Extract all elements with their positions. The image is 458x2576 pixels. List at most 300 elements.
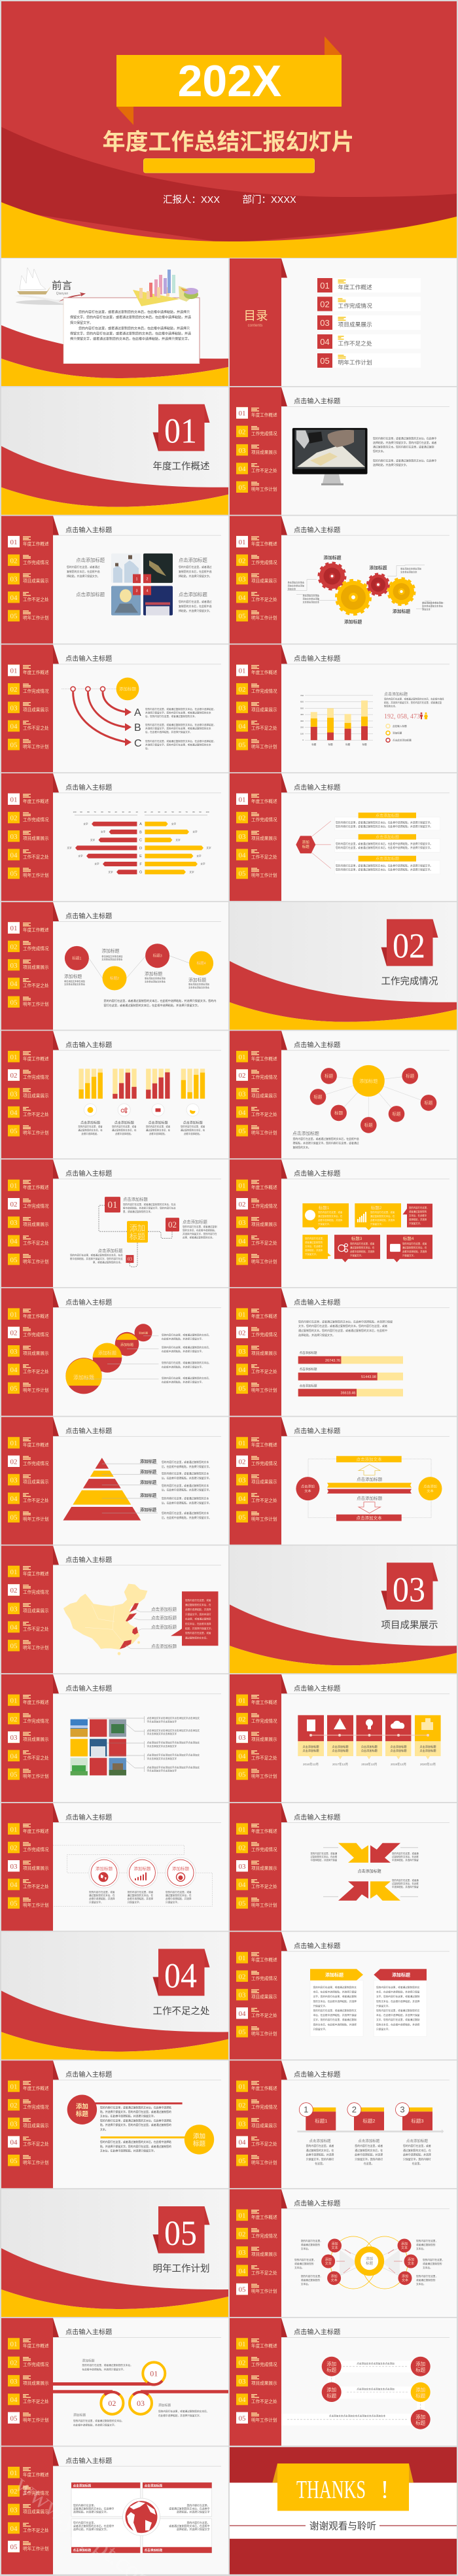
stacked bar chart: 标题	[345, 743, 351, 746]
box icons	[305, 1210, 400, 1252]
network note: 择粘贴，并选择只保留文字。您的内容打在这里，或者通过	[293, 1141, 359, 1144]
arrow descriptions	[145, 707, 216, 750]
box paragraphs	[70, 309, 191, 342]
sidebar: 工作完成情况	[251, 1718, 277, 1723]
ring 02: 02	[108, 2399, 116, 2408]
gear callouts: 添加文本	[422, 607, 431, 611]
flow circles: 标题	[415, 2392, 426, 2399]
top band	[230, 2447, 457, 2482]
card text: 您的内容打在这里，或者通过复制您的文	[376, 2009, 420, 2012]
card text: 您的内容打在这里，或者	[306, 2144, 334, 2147]
sidebar: 项目成果展示	[251, 1737, 277, 1742]
heading: 点击输入主标题	[65, 1298, 112, 1307]
intro text: 通过复制您的文本。您的内容打在这里，或者通过复制您的文本后，在此框中	[298, 1328, 387, 1332]
sidebar: 明年工作计划	[251, 486, 277, 492]
sidebar: 03	[10, 2506, 18, 2514]
axis: 80	[192, 811, 195, 813]
sidebar: 02	[10, 1330, 17, 1337]
card text: 只保留文字。	[376, 2027, 391, 2031]
circle notes: 单击添加文本单击添加	[145, 977, 166, 980]
sidebar: 01	[10, 538, 17, 546]
sidebar: 明年工作计划	[251, 1387, 277, 1393]
top bar	[336, 1456, 402, 1462]
sidebar: 工作完成情况	[251, 1332, 277, 1337]
progress labels: 36618.46	[341, 1391, 356, 1395]
sidebar: 05	[10, 1771, 18, 1779]
sidebar	[1, 1031, 228, 1158]
bar labels: 文字	[192, 830, 198, 834]
sidebar: 工作不足之处	[251, 2141, 277, 2147]
body text: 您的内容打在这里，或者通过复制您的文本后，在此框中选择粘	[100, 2140, 171, 2144]
sidebar: 02	[238, 1201, 246, 1209]
hexagon: 添加	[302, 839, 309, 845]
sidebar	[1, 516, 228, 644]
card text: 点击添加标题	[309, 2138, 331, 2144]
sidebar: 年度工作概述	[23, 1570, 49, 1576]
ring notes: 添加标题	[82, 2359, 95, 2363]
axis: 40	[164, 811, 167, 813]
card text: 此框中选择粘贴，并选择	[355, 2153, 383, 2157]
flow notes	[70, 1196, 217, 1264]
box text: 此框中选择粘贴，并选择	[370, 1218, 395, 1222]
card text: 文字。您的内容打在这里，或者通过复制	[313, 1995, 357, 1998]
sidebar: 05	[238, 1771, 246, 1779]
network nodes: 标题	[325, 1073, 334, 1079]
sidebar: 工作完成情况	[251, 1203, 277, 1209]
network nodes: 标题	[314, 1094, 323, 1100]
satellite nodes: 文本	[401, 2246, 408, 2250]
sidebar: 01	[10, 796, 17, 803]
slide: three numbered cards	[230, 2060, 457, 2188]
axis: 100	[73, 811, 77, 813]
slide: converging arrows	[230, 1803, 457, 1931]
heading: 点击输入主标题	[294, 2328, 340, 2337]
bar labels: 文字	[171, 822, 176, 825]
sidebar: 工作完成情况	[23, 1718, 49, 1723]
subtitle pill	[144, 158, 314, 173]
sidebar: 02	[10, 2359, 17, 2367]
slide: table of contents	[230, 258, 457, 386]
level text	[162, 1460, 211, 1519]
sidebar: 02	[238, 2359, 246, 2367]
sidebar: 工作完成情况	[23, 2361, 49, 2367]
sidebar	[1, 1674, 228, 1802]
sidebar: 05	[238, 612, 246, 620]
sidebar: 工作不足之处	[23, 2141, 49, 2147]
medallion text: 只保留文字。	[166, 1900, 180, 1903]
slide: circle flow	[230, 2318, 457, 2446]
sidebar: 04	[10, 2396, 18, 2404]
sidebar: 04	[10, 851, 18, 859]
chart note: 粘贴，并选择只保留文字。您的内容打在这里，或者通过复	[384, 701, 442, 704]
sidebar	[230, 387, 457, 515]
slide: butterfly chart	[1, 773, 228, 901]
flow notes: 里，或者通过复制您的文本。	[123, 1210, 153, 1213]
sidebar: 03	[10, 1091, 18, 1099]
map labels: 点击添加标题	[151, 1606, 177, 1612]
sidebar: 02	[238, 1716, 246, 1723]
level text: 您的内容打在这里，或者通过复制您的文本	[162, 1484, 209, 1487]
sidebar: 年度工作概述	[23, 798, 49, 804]
circle stack: 添加标题	[120, 1343, 133, 1347]
bar labels: A	[139, 822, 142, 826]
slide: photo grid	[1, 516, 228, 644]
progress labels: 点击添加标题	[300, 1350, 317, 1355]
hub text: 或者通过复制您的	[416, 2243, 436, 2246]
level labels: 添加标题	[140, 1458, 157, 1464]
sidebar: 03	[10, 962, 18, 970]
box 01: 01	[107, 1200, 118, 1210]
gear labels: 添加标题	[369, 565, 387, 571]
heading: 点击输入主标题	[294, 2199, 340, 2208]
panel text: 选择粘贴，并选择只保留文字。	[73, 2528, 109, 2531]
text: description	[373, 437, 436, 467]
photo captions	[67, 557, 212, 612]
circles: 标题2	[110, 976, 119, 981]
satellite nodes: 文本	[402, 2278, 408, 2283]
sidebar: 工作完成情况	[251, 431, 277, 436]
box text: 或者通过复制您的	[305, 1241, 323, 1244]
circle notes: 在此框中选择粘贴，并选择只保留文字。	[162, 1365, 204, 1368]
card icons	[307, 1718, 433, 1731]
gear callouts: 单击添加文本单击	[288, 581, 304, 584]
card text: 2018年12月	[361, 1762, 377, 1767]
sidebar: 04	[238, 1495, 246, 1503]
sidebar: 02	[238, 1458, 246, 1466]
red circle with bar	[67, 2095, 183, 2125]
sidebar: 工作不足之处	[23, 725, 49, 731]
slide: section 02	[230, 902, 457, 1030]
sidebar: 02	[10, 557, 17, 565]
red note: 此框中选择粘贴，并选择	[185, 1608, 211, 1611]
flow circles: 添加	[415, 2414, 425, 2420]
sidebar: 03	[238, 704, 246, 712]
box text: 您的内容打在这里，或者	[318, 1210, 343, 1214]
yellow tag: 添加标题	[325, 1972, 344, 1977]
arrow text: 您的内容打在这里，或者通	[310, 1852, 338, 1855]
sidebar: 项目成果展示	[251, 1350, 277, 1356]
sidebar: 01	[10, 925, 17, 932]
axis: 90	[199, 811, 202, 813]
sidebar	[230, 2189, 457, 2317]
circle stack: 添加标题	[73, 1374, 94, 1381]
card text: 您的内容打在这里，或者通过复制您的文	[313, 1985, 357, 1989]
sidebar: 年度工作概述	[251, 798, 277, 804]
progress labels	[300, 1350, 376, 1395]
letters: C	[134, 738, 142, 749]
slide: two circles with bars	[1, 2060, 228, 2188]
sidebar: 01	[238, 1053, 246, 1061]
card text: 您的内容打在这里，或者通过复制您的文	[376, 1985, 420, 1989]
arrow text: 过复制您的文本后，在此框	[310, 1855, 338, 1858]
sidebar: 项目成果展示	[23, 964, 49, 970]
sidebar: 05	[10, 1900, 18, 1908]
sidebar: 03	[10, 1734, 18, 1742]
body text: 贴，并选择只保留文字。您的内容打在这里，或者通过复制您的	[100, 2145, 171, 2148]
red circle with bar: 标题	[76, 2110, 88, 2118]
circles	[65, 944, 213, 991]
sidebar: 工作不足之处	[251, 468, 277, 474]
sidebar: 04	[10, 1495, 18, 1503]
sidebar: 年度工作概述	[251, 1184, 277, 1190]
hub text: 或者通过复制您的	[294, 2262, 314, 2265]
dotted frame	[308, 1459, 431, 1518]
card panels	[310, 1980, 427, 2036]
axis: 50	[171, 811, 174, 813]
sidebar	[1, 1545, 228, 1673]
text panels: 您的内容打在这里，或者通过复制您的文本后，在此框中选择粘贴，并选择只保留文字。	[336, 864, 432, 867]
captions: 点击添加标题	[183, 1120, 203, 1125]
sidebar: 03	[238, 1477, 246, 1485]
sidebar: 年度工作概述	[23, 927, 49, 933]
timeline line	[309, 1734, 429, 1737]
sidebar: 02	[10, 943, 17, 951]
hub text	[294, 2239, 444, 2285]
bar labels: F	[139, 863, 142, 867]
card labels: 标题3	[411, 2117, 424, 2124]
box text: 通过复制您的文本后，在	[350, 1246, 375, 1249]
sidebar: 工作完成情况	[23, 559, 49, 565]
photo captions: 您的内容打在这里，或者通过	[67, 565, 100, 569]
gear callouts: 文本单击添加文本	[400, 571, 417, 573]
right circle: 文本	[427, 1489, 434, 1494]
sidebar: 02	[238, 1844, 246, 1852]
satellite nodes: 添加	[401, 2242, 408, 2246]
sidebar: 01	[238, 1954, 246, 1962]
heading: 点击输入主标题	[65, 2456, 112, 2465]
sidebar: 02	[10, 1458, 17, 1466]
sidebar: 年度工作概述	[251, 669, 277, 675]
photo captions: 点击添加标题	[76, 557, 105, 563]
gear callouts: 添加文本单击添加	[302, 597, 319, 601]
sidebar: 工作完成情况	[251, 1460, 277, 1466]
sidebar	[230, 1417, 457, 1545]
sidebar: 工作完成情况	[23, 1332, 49, 1337]
chart note: 制您的文本。	[384, 705, 397, 708]
sidebar: 02	[238, 1973, 246, 1981]
sidebar: 01	[10, 1053, 17, 1061]
circle notes: 单击添加文本单击添加	[64, 979, 85, 983]
circle notes: 在此框中选择粘贴，并选择只保留文字。	[162, 1350, 204, 1353]
card text: 本后，在此框中选择粘贴，并选择只保留	[313, 2013, 357, 2017]
stacked bar chart: 标题	[362, 743, 367, 746]
sidebar: 01	[238, 1697, 246, 1705]
flow circles: 标题	[326, 2392, 337, 2399]
sidebar: 工作不足之处	[251, 1884, 277, 1890]
hub text: 或者通过复制您的	[301, 2243, 321, 2246]
network note: 复制您的文本。	[293, 1146, 311, 1149]
legend	[386, 724, 412, 742]
sidebar: 05	[238, 1127, 246, 1135]
sidebar: 项目成果展示	[23, 578, 49, 584]
bar labels: B	[139, 830, 142, 834]
hexagon: 标题	[302, 844, 309, 849]
text: description: 选择粘贴，并选择只保留文字。	[373, 463, 408, 467]
network links	[318, 1076, 429, 1125]
photo grid: 2	[147, 577, 149, 581]
flow circles: 标题	[415, 2367, 426, 2373]
card text: 本后，在此框中选择粘贴，并选择只保留	[376, 1990, 420, 1993]
arrow descriptions: 您的内容打在这里，或者通过复制您的文本后，在此框中选择粘贴，	[145, 739, 216, 743]
sidebar: 03	[238, 2249, 246, 2257]
card labels: 标题2	[362, 2117, 376, 2124]
sidebar	[230, 1159, 457, 1287]
slide: network	[230, 1031, 457, 1158]
right yellow bars	[145, 822, 203, 874]
sidebar: 05	[238, 870, 246, 878]
panel text: 选择粘贴，并选择只保留文字。	[73, 2510, 109, 2513]
sidebar: 项目成果展示	[23, 1222, 49, 1227]
small arrows	[336, 2250, 402, 2273]
satellite nodes: 添加	[331, 2274, 338, 2279]
card text: 2017年12月	[332, 1762, 348, 1767]
arrow descriptions: 后。	[145, 747, 150, 750]
heading: contents: 目录	[243, 309, 268, 323]
text: description: 通过复制您的文本。您的内容打在这里，或者通过复制	[373, 446, 434, 449]
section title: 工作不足之处	[153, 2006, 209, 2017]
hub text: 或者通过复制您的	[416, 2278, 436, 2282]
heading: 点击输入主标题	[65, 1040, 112, 1049]
sidebar: 工作完成情况	[251, 688, 277, 694]
sidebar: 工作不足之处	[251, 596, 277, 602]
sidebar: 明年工作计划	[251, 2031, 277, 2037]
bar labels: 文字	[108, 870, 113, 873]
arrow descriptions: 并选择只保留文字。您的内容打在这里，或者通过复制您的文本	[145, 743, 211, 747]
letters	[134, 707, 142, 749]
sidebar: 04	[238, 465, 246, 473]
circle notes: 添加标题	[188, 977, 206, 983]
sidebar: 工作不足之处	[251, 1498, 277, 1504]
card text	[302, 1744, 436, 1767]
stacked bar chart: 500	[300, 707, 304, 709]
flow notes: 这里，或者通过复制您的文本。	[183, 1236, 215, 1239]
bar labels: 文字	[206, 846, 211, 849]
sidebar: 05	[238, 1385, 246, 1393]
gear labels: 添加标题	[323, 555, 342, 560]
text panels: 点击添加标题	[376, 813, 399, 818]
sidebar: 工作完成情况	[251, 817, 277, 822]
sidebar: 05	[10, 2414, 18, 2422]
slide: preface	[1, 258, 228, 386]
flow notes: 并选择只保留文字。您的内容打在	[183, 1232, 217, 1235]
sidebar: 项目成果展示	[23, 836, 49, 841]
sidebar: 03	[238, 2120, 246, 2128]
arrow text: 中选择粘贴，并选择只保留	[392, 1858, 419, 1861]
bar labels: 文字	[175, 838, 181, 841]
sidebar: 05	[10, 1513, 18, 1521]
card text: 点击添加标题	[390, 1748, 407, 1753]
curved arrows	[71, 686, 132, 746]
closing text: 谢谢观看与聆听	[309, 2520, 376, 2532]
sidebar: 年度工作概述	[251, 412, 277, 418]
yellow wave	[1, 202, 457, 258]
sidebar: 工作完成情况	[251, 2232, 277, 2238]
heading: 点击输入主标题	[65, 1169, 112, 1178]
sidebar: 05	[238, 2286, 246, 2294]
box text: 通过复制您的文本后，在	[402, 1246, 427, 1249]
photo captions: 复制您的文本后，在此框中选	[179, 570, 212, 573]
sidebar: 05	[238, 2414, 246, 2422]
sidebar: 工作完成情况	[23, 2490, 49, 2496]
slide: opposing arrows	[230, 1417, 457, 1545]
sidebar: 年度工作概述	[251, 2214, 277, 2220]
stacked bar chart: 700	[300, 694, 304, 697]
card text: 在这里。	[412, 2162, 422, 2165]
arrow text: 过复制您的文本后，在此框	[392, 1882, 419, 1885]
sidebar: 工作不足之处	[23, 1498, 49, 1504]
heading: 点击输入主标题	[294, 1684, 340, 1693]
hub text: 您的内容打在这里，	[416, 2239, 438, 2242]
photo captions: 您的内容打在这里，或者通过	[179, 600, 212, 603]
slide: stacked bar chart	[230, 644, 457, 772]
level labels: 添加标题	[140, 1479, 157, 1485]
gear yellow large	[337, 581, 370, 614]
card text: 点击添加标题	[390, 1744, 407, 1749]
red wave	[1, 325, 228, 378]
circle notes: 您的内容打在这里，或者通过复制您的文本后，	[162, 1377, 211, 1380]
icon: 3d bar chart	[133, 270, 198, 306]
level text: 后，在此框中选择粘贴，并选择只保留文字。	[162, 1465, 211, 1468]
card text: 点击添加标题	[302, 1744, 319, 1749]
stacked bar chart: 600	[300, 701, 304, 703]
number circles: 1	[304, 2105, 308, 2115]
red tag: 添加标题	[392, 1972, 410, 1977]
slide: two cards	[230, 1932, 457, 2060]
panel text: 您的内容打在这里，	[186, 2521, 209, 2524]
network nodes: 标题	[393, 1111, 401, 1117]
photo captions: 点击添加标题	[76, 591, 105, 597]
card text: 文字。您的内容打在这里，或者通过复制	[376, 2018, 420, 2021]
panel text: 选择粘贴，并选择只保留文字	[177, 2528, 210, 2531]
circle notes	[162, 1333, 211, 1384]
box text: 标题4	[403, 1235, 414, 1241]
panel titles: 点击添加标题	[144, 2548, 162, 2552]
intro text: 您的内容打在这里，或者通过复制您的文本后，在此框中选择粘贴，并选择只保留	[298, 1319, 393, 1323]
text panels: 您的内容打在这里，或者通过复制您的文本后，在此框中选择粘贴，并选择只保留文字。	[336, 824, 432, 828]
heading: 点击输入主标题	[294, 1942, 340, 1950]
sidebar: 03	[238, 1734, 246, 1742]
big number: 192, 058, 473	[384, 713, 420, 720]
circle notes: 单击添加文本单击添加	[101, 955, 122, 958]
sidebar: 项目成果展示	[23, 1479, 49, 1485]
stacked bar chart: 400	[300, 713, 304, 716]
sidebar: 05	[238, 1513, 246, 1521]
sidebar: 04	[238, 1366, 246, 1374]
stacked bar chart: 标题	[311, 743, 317, 746]
sidebar: 03	[10, 1863, 18, 1871]
center box: 标题	[130, 1232, 145, 1241]
bar labels: G	[139, 871, 142, 875]
card text: 通过复制您的文本后，在	[403, 2149, 431, 2152]
sidebar	[230, 1031, 457, 1158]
mosaic text: 点击添加文字点击添加文字点击添加文字点击添加文	[147, 1741, 200, 1744]
circle notes: 您的内容打在这里，或者通过复制您的文本后，	[162, 1361, 211, 1364]
card text	[313, 1985, 420, 2031]
box text: 选择粘贴，并选择	[409, 1218, 427, 1221]
card bodies	[306, 2111, 432, 2130]
contents list: 工作不足之处	[338, 340, 372, 347]
box text: 只保留文字。	[409, 1222, 422, 1225]
flow notes: 框中选择粘贴，并选择只保留文字。您的内容打在这	[70, 1257, 123, 1260]
sidebar: 03	[10, 1477, 18, 1485]
hexagon	[296, 836, 315, 853]
sidebar: 02	[10, 1716, 17, 1723]
card text: 2016年12月	[303, 1762, 319, 1767]
grey arrow	[297, 2129, 444, 2134]
sidebar: 02	[238, 557, 246, 565]
contents list: 年度工作概述	[338, 283, 372, 291]
sidebar	[1, 644, 228, 772]
